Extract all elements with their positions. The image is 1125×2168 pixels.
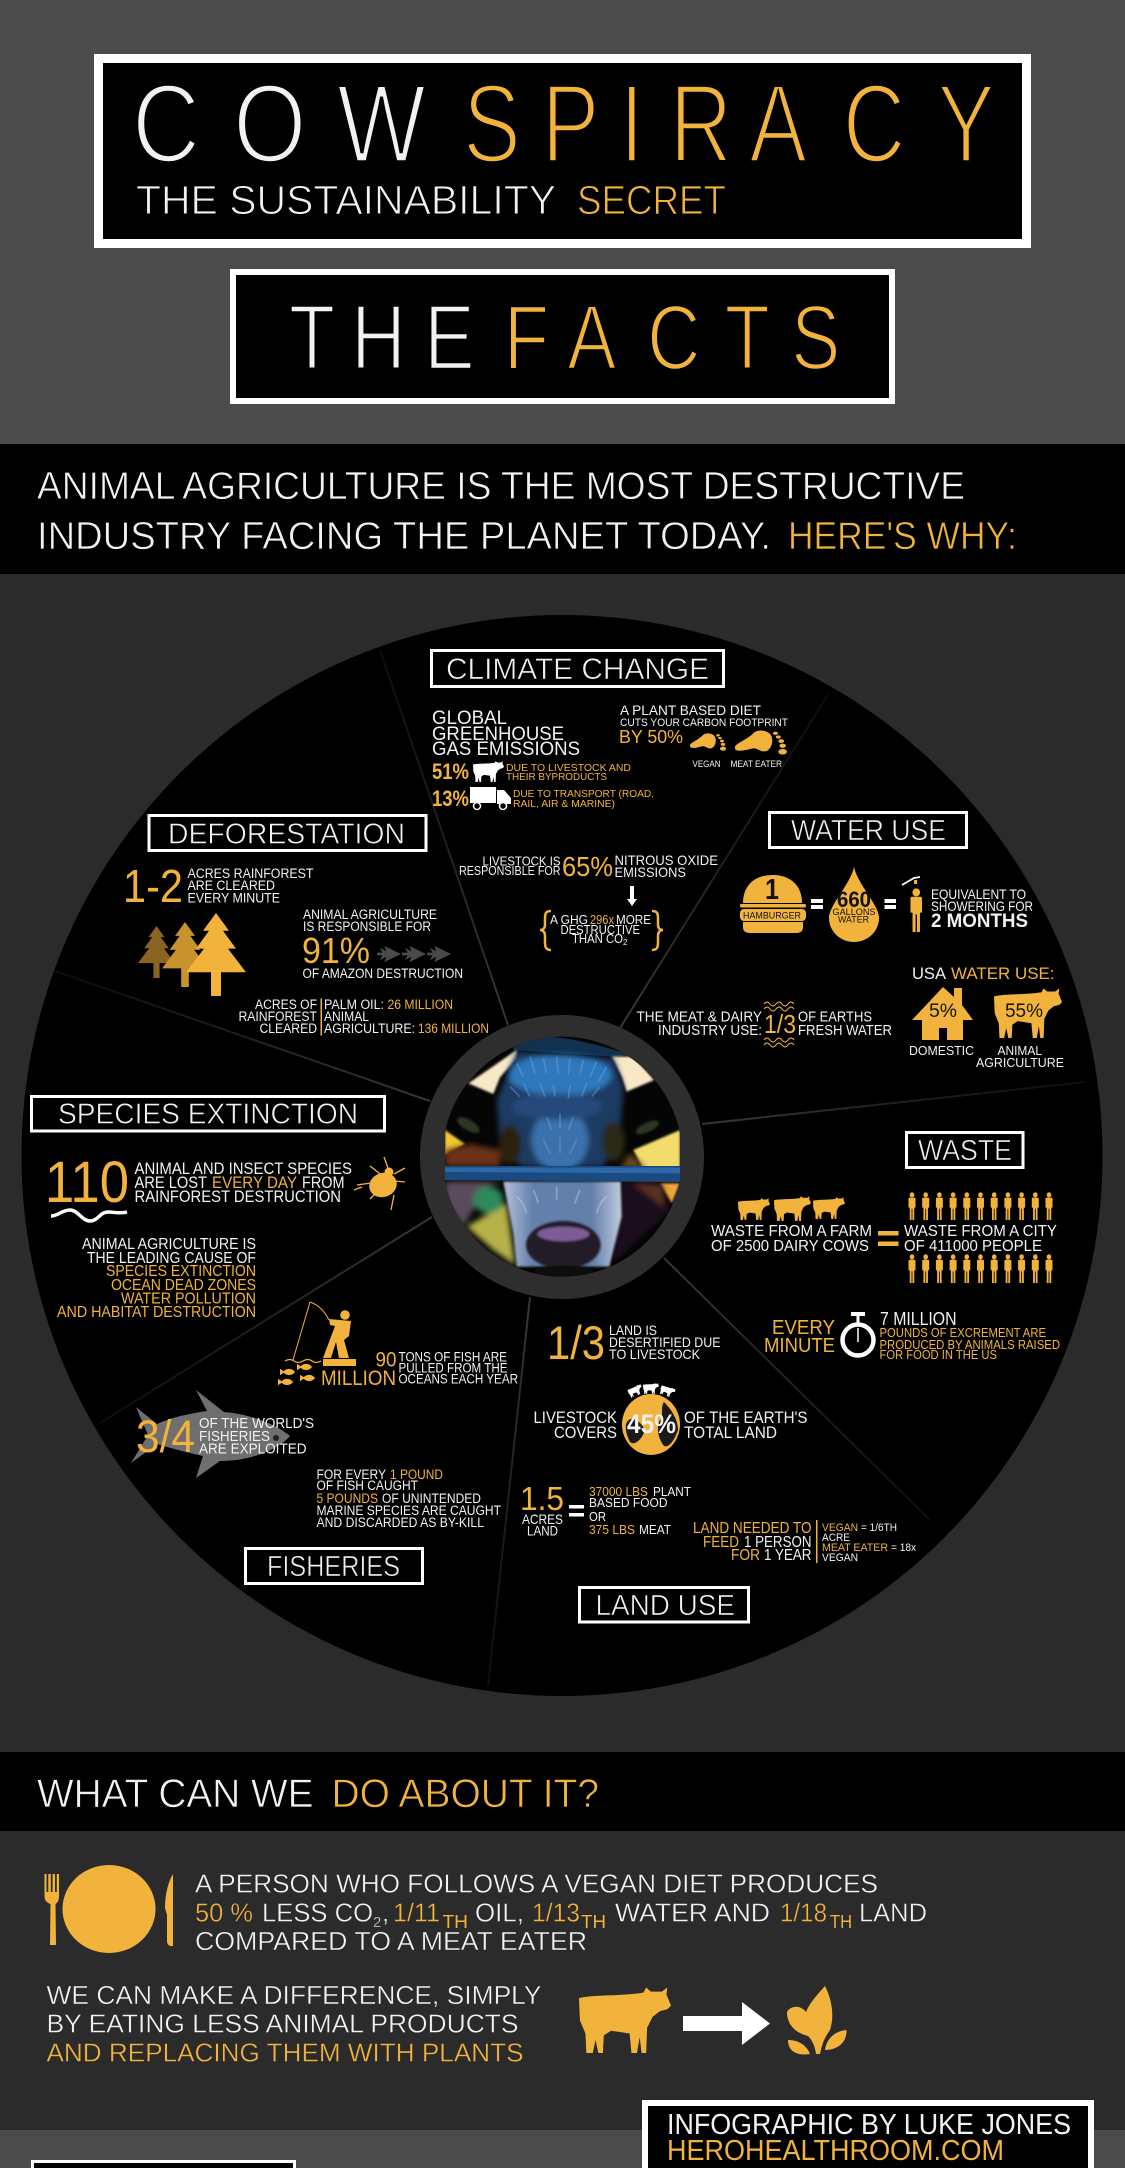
section label: WATER USE — [791, 815, 946, 847]
plant based diet text — [619, 702, 788, 747]
farm waste text: WASTE FROM A FARM — [711, 1223, 872, 1240]
nitrous oxide stat: EMISSIONS — [614, 864, 686, 880]
by-kill text: OF UNINTENDED — [382, 1491, 481, 1506]
section label: CLIMATE CHANGE — [446, 653, 709, 686]
box: The Facts — [233, 272, 892, 401]
fresh water stat: OF EARTHS — [798, 1008, 872, 1026]
rainforest cleared table: AGRICULTURE: — [324, 1021, 415, 1036]
credit box — [645, 2103, 1091, 2168]
icon: water drop 660 gallons: GALLONS — [832, 907, 876, 917]
plant versus meat text: MEAT — [639, 1522, 671, 1537]
stat: 51%: 51% — [432, 759, 469, 784]
banner: intro statement: ANIMAL AGRICULTURE IS THE MOST DESTRUCTIVE — [37, 465, 965, 508]
excrement stat: FOR FOOD IN THE US — [880, 1347, 997, 1362]
icon: vegan footprint — [690, 733, 726, 751]
transport text — [513, 788, 654, 810]
earth land text: TOTAL LAND — [684, 1423, 777, 1442]
by-kill text: FOR EVERY — [316, 1467, 386, 1482]
icon: hamburger — [740, 874, 806, 933]
icon: three cows — [738, 1196, 845, 1221]
species lost text: ARE LOST — [134, 1173, 207, 1192]
icon: plate with fork and knife — [44, 1865, 173, 1953]
section: waste — [711, 1132, 1060, 1362]
icon: stopwatch — [842, 1314, 874, 1356]
icon: grey fallen trees — [377, 946, 451, 962]
excrement stat — [880, 1309, 1060, 1362]
nitrous oxide stat: NITROUS OXIDE — [614, 852, 718, 868]
make a difference text: BY EATING LESS ANIMAL PRODUCTS — [46, 2008, 518, 2038]
plant versus meat text: PLANT — [653, 1484, 691, 1499]
main wheel disc — [22, 615, 1102, 1696]
livestock text: THEIR BYPRODUCTS — [506, 771, 607, 783]
icon: grey shark — [131, 1390, 290, 1478]
center ring — [420, 1015, 704, 1299]
icon: globe 45%: 45% — [627, 1409, 676, 1439]
water captions: ANIMAL — [998, 1043, 1042, 1058]
stat: 1-2 acres: 1-2 — [123, 860, 183, 912]
icon: cow 55% — [994, 988, 1062, 1038]
plant based diet text: A PLANT BASED DIET — [620, 702, 761, 718]
vegan diet text: 1/13 — [532, 1898, 580, 1928]
title word: SPIRACY: SPIRACY — [463, 63, 995, 187]
plant versus meat text: 37000 LBS — [589, 1484, 648, 1499]
nitrous oxide stat: RESPONSIBLE FOR — [459, 864, 560, 878]
by-kill text: 1 POUND — [390, 1467, 443, 1482]
icon: hamburger: HAMBURGER — [743, 910, 801, 922]
farm waste text: OF 2500 DAIRY COWS — [711, 1238, 869, 1255]
GHG text: 296x — [590, 913, 615, 927]
water captions — [909, 1043, 1064, 1070]
land needed text: 1 PERSON — [744, 1534, 812, 1551]
subtitle accent: SECRET — [577, 177, 726, 223]
icon: bug — [354, 1157, 405, 1210]
make a difference text — [46, 1980, 542, 2068]
species lost text — [134, 1159, 352, 1206]
USA water use heading: WATER USE: — [951, 964, 1054, 983]
footer box — [32, 2162, 294, 2168]
footprint captions: MEAT EATER — [730, 759, 782, 769]
icon: water drop 660 gallons: WATER — [838, 914, 869, 924]
banner: intro statement: HERE'S WHY: — [788, 515, 1017, 558]
shower text: SHOWERING FOR — [931, 898, 1033, 914]
stat: 1-2 acres — [123, 860, 314, 912]
credit box: INFOGRAPHIC BY LUKE JONES — [667, 2109, 1071, 2141]
banner: what can we do — [0, 1752, 1125, 1831]
vegan versus meat eater text: ACRE — [822, 1532, 850, 1544]
by-kill text: OF FISH CAUGHT — [316, 1478, 418, 1493]
section: climate change — [432, 650, 788, 950]
stat: 90 million tons: OCEANS EACH YEAR — [398, 1372, 518, 1386]
stat: 3/4 fisheries — [136, 1411, 314, 1462]
by-kill text: AND DISCARDED AS BY-KILL — [316, 1515, 484, 1530]
GHG text: 2 — [623, 938, 628, 947]
brace left — [540, 911, 551, 950]
icon: water drop 660 gallons — [829, 867, 879, 942]
section: species extinction — [32, 1096, 405, 1321]
background: main panel — [0, 574, 1125, 2130]
stat: 3/4 fisheries: 3/4 — [136, 1411, 195, 1462]
icon: water drop 660 gallons: 660 — [837, 887, 871, 912]
GHG text: MORE — [616, 913, 651, 927]
land needed text: 1 YEAR — [764, 1547, 812, 1564]
banner: intro statement: INDUSTRY FACING THE PLANET TODAY. — [37, 515, 771, 558]
rainforest cleared table: 136 MILLION — [418, 1021, 489, 1036]
livestock covers text: LIVESTOCK — [534, 1408, 618, 1427]
stat: 1/3 desertified — [547, 1316, 720, 1369]
stat: 90 million tons: 90 — [376, 1348, 396, 1372]
equals sign — [569, 1505, 584, 1516]
vegan versus meat eater text: MEAT EATER — [822, 1542, 888, 1554]
stat: 13%: 13% — [432, 786, 469, 811]
land needed text: FEED — [703, 1534, 739, 1551]
leading cause text — [57, 1236, 256, 1321]
vegan diet text: OIL, — [475, 1898, 524, 1928]
stat: 1/3 desertified: 1/3 — [547, 1316, 605, 1369]
USA water use heading: USA — [912, 964, 947, 983]
icon: plant — [787, 1986, 847, 2054]
equals sign — [811, 899, 823, 909]
icon: trees — [138, 913, 246, 996]
credit box: HEROHEALTHROOM.COM — [667, 2135, 1004, 2167]
stat: 1.5 acres: ACRES — [522, 1512, 563, 1527]
icon: truck — [470, 787, 511, 810]
stat: 3/4 fisheries: ARE EXPLOITED — [199, 1442, 306, 1458]
stat: 91% amazon: ANIMAL AGRICULTURE — [303, 907, 437, 922]
stat: 1/3 desertified: TO LIVESTOCK — [609, 1346, 701, 1362]
vegan diet text: 2 — [373, 1914, 381, 1931]
greenhouse gas heading: GAS EMISSIONS — [432, 739, 580, 760]
footprint captions — [692, 759, 782, 769]
icon: house 5% — [912, 987, 973, 1040]
vegan versus meat eater text: = 1/6TH — [861, 1522, 897, 1534]
vegan diet text: COMPARED TO A MEAT EATER — [195, 1926, 587, 1956]
GHG text: DESTRUCTIVE — [560, 923, 640, 937]
arrow — [683, 2002, 770, 2045]
stat: 1-2 acres: ARE CLEARED — [188, 878, 275, 893]
excrement stat: PRODUCED BY ANIMALS RAISED — [880, 1337, 1060, 1352]
species lost text: EVERY DAY — [212, 1173, 297, 1192]
species lost text: ANIMAL AND INSECT SPECIES — [134, 1159, 352, 1178]
section label: LAND USE — [596, 1590, 735, 1622]
section: deforestation — [123, 816, 489, 1036]
livestock text — [506, 762, 631, 783]
background: top band — [0, 0, 1125, 444]
vegan diet text: , — [382, 1898, 389, 1928]
section label: FISHERIES — [267, 1551, 400, 1583]
land needed text: FOR — [731, 1547, 760, 1564]
icon: person showering — [902, 877, 922, 932]
earth land text — [684, 1408, 808, 1442]
vegan diet text: 50 % — [195, 1898, 253, 1928]
nitrous oxide stat: LIVESTOCK IS — [482, 854, 560, 868]
city waste text: OF 411000 PEOPLE — [904, 1238, 1042, 1255]
stat: 91% amazon — [302, 907, 463, 981]
stat: 1/3 desertified: LAND IS — [609, 1322, 657, 1338]
icon: meat eater footprint — [735, 731, 787, 755]
stat: 91% amazon: OF AMAZON DESTRUCTION — [302, 966, 463, 981]
icon: people row top — [908, 1192, 1052, 1220]
section: land use — [520, 1316, 916, 1622]
excrement stat: 7 MILLION — [880, 1309, 956, 1329]
greenhouse gas heading — [432, 708, 580, 760]
fresh water stat: THE MEAT & DAIRY — [636, 1008, 762, 1026]
vegan diet text: 1/18 — [780, 1898, 827, 1928]
arrow down — [627, 886, 637, 906]
nitrous oxide stat: 65% — [562, 851, 613, 882]
rainforest cleared table: 26 MILLION — [388, 997, 453, 1012]
background: footer band — [0, 2130, 1125, 2168]
species lost text: RAINFOREST DESTRUCTION — [134, 1187, 341, 1206]
GHG text: A GHG — [550, 913, 588, 927]
leading cause text: THE LEADING CAUSE OF — [87, 1250, 256, 1267]
rainforest cleared table: ACRES OF — [255, 997, 317, 1012]
heading word: THE: THE — [289, 286, 475, 389]
subtitle: THE SUSTAINABILITY — [136, 177, 556, 223]
stat: 1.5 acres — [520, 1480, 564, 1538]
stat: 1-2 acres: ACRES RAINFOREST — [188, 866, 314, 881]
section: fisheries — [131, 1302, 518, 1584]
vegan diet text: TH — [442, 1912, 468, 1932]
stat: 91% amazon: IS RESPONSIBLE FOR — [303, 919, 431, 934]
plant versus meat text: BASED FOOD — [589, 1495, 668, 1510]
plant versus meat text: OR — [589, 1509, 606, 1524]
make a difference text: AND REPLACING THEM WITH PLANTS — [46, 2038, 524, 2068]
water captions: AGRICULTURE — [976, 1055, 1064, 1070]
wave accent — [51, 1210, 127, 1221]
title box: Cowspiracy — [98, 58, 1026, 244]
stat: 3/4 fisheries: FISHERIES — [199, 1429, 270, 1445]
center photo: cow behind bar — [445, 1036, 680, 1277]
city waste text — [904, 1223, 1057, 1255]
livestock text: DUE TO LIVESTOCK AND — [506, 762, 631, 774]
excrement stat: POUNDS OF EXCREMENT ARE — [880, 1325, 1046, 1340]
rainforest cleared table: CLEARED — [260, 1021, 317, 1036]
by-kill text: 5 POUNDS — [316, 1491, 378, 1506]
equals sign — [884, 899, 896, 909]
plant based diet text: BY 50% — [619, 726, 683, 747]
vegan versus meat eater text: VEGAN — [822, 1552, 858, 1564]
every minute text: EVERY — [772, 1317, 835, 1339]
land needed text: LAND NEEDED TO — [693, 1520, 812, 1537]
leading cause text: AND HABITAT DESTRUCTION — [57, 1304, 256, 1321]
greenhouse gas heading: GLOBAL — [432, 708, 507, 729]
city waste text: WASTE FROM A CITY — [904, 1223, 1057, 1240]
banner: what can we do: WHAT CAN WE — [37, 1772, 314, 1816]
section label: WASTE — [918, 1135, 1012, 1167]
stat: 1.5 acres: 1.5 — [520, 1480, 564, 1517]
GHG text — [550, 913, 651, 947]
vegan diet text: LESS CO — [262, 1898, 373, 1928]
icon: cow — [579, 1987, 671, 2053]
shower text: 2 MONTHS — [931, 911, 1028, 932]
rainforest cleared table: ANIMAL — [324, 1009, 369, 1024]
vegan versus meat eater text — [822, 1522, 916, 1564]
stat: 90 million tons — [321, 1348, 518, 1390]
icon: fisherman — [285, 1302, 356, 1366]
transport text: DUE TO TRANSPORT (ROAD, — [513, 788, 654, 800]
section label: DEFORESTATION — [168, 818, 405, 850]
stat: 3/4 fisheries: OF THE WORLD'S — [199, 1416, 314, 1432]
section label: SPECIES EXTINCTION — [58, 1098, 358, 1130]
stat: 1/3 desertified: DESERTIFIED DUE — [609, 1334, 720, 1350]
head outline — [503, 1182, 622, 1267]
stat: 91% amazon: 91% — [302, 930, 370, 971]
equals sign gold — [878, 1231, 898, 1246]
shower text — [931, 886, 1033, 932]
fresh water stat — [636, 1008, 892, 1039]
icon: globe 45% — [622, 1383, 680, 1455]
brace right — [652, 911, 663, 950]
farm waste text — [711, 1223, 872, 1255]
water captions: DOMESTIC — [909, 1043, 974, 1058]
vegan diet text: LAND — [859, 1898, 927, 1928]
plant based diet text: CUTS YOUR CARBON FOOTPRINT — [620, 717, 788, 729]
banner: what can we do: DO ABOUT IT? — [332, 1772, 599, 1816]
footprint captions: VEGAN — [692, 759, 720, 769]
earth land text: OF THE EARTH'S — [684, 1408, 808, 1427]
rainforest cleared table: RAINFOREST — [238, 1009, 317, 1024]
greenhouse gas heading: GREENHOUSE — [432, 724, 564, 745]
icon: white cow — [473, 761, 504, 782]
water waves — [764, 1002, 794, 1047]
vegan diet text: TH — [581, 1912, 606, 1932]
species lost text: FROM — [302, 1173, 344, 1192]
vegan diet text — [195, 1868, 927, 1956]
heading word: FACTS: FACTS — [504, 286, 840, 389]
every minute text: MINUTE — [764, 1335, 835, 1357]
stat: 90 million tons: PULLED FROM THE — [398, 1360, 508, 1376]
nitrous oxide stat — [459, 851, 718, 882]
transport text: RAIL, AIR & MARINE) — [513, 798, 615, 810]
fur strokes — [510, 1057, 607, 1153]
icon: hamburger: 1 — [765, 874, 779, 906]
vegan diet text: TH — [830, 1912, 852, 1932]
section: water use — [636, 812, 1064, 1070]
vegan versus meat eater text: = 18x — [891, 1542, 916, 1554]
icon: small fish — [278, 1364, 315, 1385]
stat: 90 million tons: TONS OF FISH ARE — [398, 1350, 507, 1364]
GHG text: THAN CO — [572, 932, 623, 946]
stat: 90 million tons: MILLION — [321, 1367, 396, 1390]
stat: 1.5 acres: LAND — [527, 1524, 558, 1538]
vegan diet text: 1/11 — [393, 1898, 440, 1928]
shower text: EQUIVALENT TO — [931, 886, 1026, 902]
plant versus meat text — [589, 1484, 691, 1537]
fresh water stat: 1/3 — [764, 1009, 796, 1039]
livestock covers text — [534, 1408, 618, 1442]
vegan diet text: A PERSON WHO FOLLOWS A VEGAN DIET PRODUCES — [195, 1868, 878, 1898]
title word: COW: COW — [132, 62, 426, 186]
icon: cow 55%: 55% — [1005, 1001, 1043, 1022]
icon: house 5%: 5% — [929, 1001, 957, 1022]
leading cause text: ANIMAL AGRICULTURE IS — [82, 1236, 256, 1253]
leading cause text: OCEAN DEAD ZONES — [111, 1277, 256, 1294]
stat: 110: 110 — [45, 1150, 129, 1215]
by-kill text: MARINE SPECIES ARE CAUGHT — [316, 1503, 501, 1518]
sector dividers — [55, 650, 1085, 1686]
vegan diet text: WATER AND — [615, 1898, 770, 1928]
vegan versus meat eater text: VEGAN — [822, 1522, 858, 1534]
stat: 1-2 acres: EVERY MINUTE — [188, 890, 280, 906]
rainforest cleared table: PALM OIL: — [324, 997, 384, 1012]
every minute text — [764, 1317, 835, 1357]
fresh water stat: INDUSTRY USE: — [658, 1022, 762, 1039]
rainforest cleared table — [238, 997, 489, 1036]
land needed text — [693, 1520, 818, 1564]
banner: intro statement — [0, 444, 1125, 574]
make a difference text: WE CAN MAKE A DIFFERENCE, SIMPLY — [46, 1980, 542, 2010]
by-kill text — [316, 1467, 501, 1530]
livestock covers text: COVERS — [554, 1423, 617, 1442]
fresh water stat: FRESH WATER — [798, 1022, 892, 1039]
leading cause text: WATER POLLUTION — [121, 1290, 256, 1308]
leading cause text: SPECIES EXTINCTION — [106, 1263, 256, 1280]
icon: people row bottom — [908, 1254, 1052, 1283]
plant versus meat text: 375 LBS — [589, 1522, 635, 1537]
